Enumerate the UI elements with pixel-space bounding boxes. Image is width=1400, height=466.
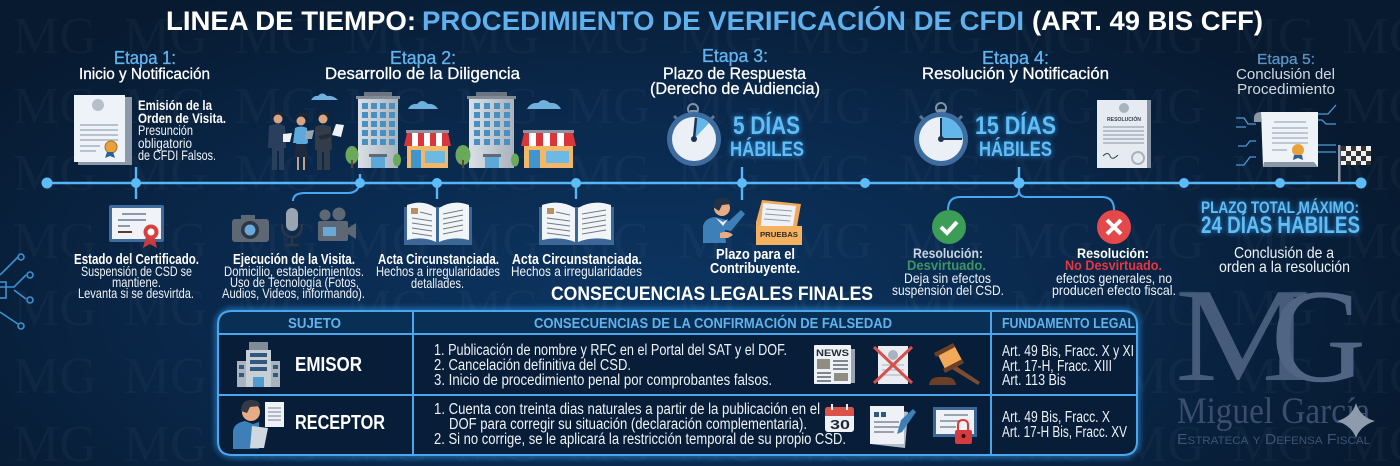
text: certificate status xyxy=(74,252,199,301)
text: receptor legal basis: Art. 17-H Bis, Fracc. XV xyxy=(1002,424,1127,441)
text: resolution desvirtuado: Resolución: xyxy=(913,245,983,261)
stage 3 heading: (Derecho de Audiencia) xyxy=(650,79,820,98)
title: (ART. 49 BIS CFF) xyxy=(1032,6,1263,36)
logo: Miguel García: Estrateca y Defensa Fiscal xyxy=(1177,431,1370,448)
icon: calendar 30 xyxy=(825,404,854,432)
stage 5 heading: Etapa 5: xyxy=(1257,51,1315,68)
text: 5 días hábiles: 5 DÍAS xyxy=(733,111,800,140)
text: certificate status: Estado del Certificado. xyxy=(74,252,199,268)
text: resolution desvirtuado xyxy=(892,245,1004,298)
stage 5 heading xyxy=(1236,51,1335,98)
background MG watermark: MG MG MG MG MG MG MG MG MG MG MG MG MG xyxy=(13,8,1400,65)
text: receptor consequences: 2. Si no corrige, se le aplicará la restricción temporal de su propio CSD. xyxy=(434,431,846,448)
text: maximum term: 24 DÍAS HÁBILES xyxy=(1201,211,1360,239)
text: emisor legal basis xyxy=(1002,343,1134,389)
text: emisor consequences: 1. Publicación de nombre y RFC en el Portal del SAT y el DOF. xyxy=(434,342,787,359)
officer 2 xyxy=(293,112,314,170)
text: acta 2: Hechos a irregularidades xyxy=(511,263,642,279)
stage 4 heading: Etapa 4: xyxy=(982,48,1049,68)
timeline xyxy=(42,167,1366,210)
logo: Miguel García: Miguel García xyxy=(1177,391,1370,432)
stage 4 heading: Resolución y Notificación xyxy=(922,64,1109,83)
text: acta 1: Hechos a irregularidades xyxy=(376,263,500,279)
icon: open book 2 xyxy=(539,203,614,245)
icon: taxpayer with evidence folder xyxy=(703,198,802,245)
logo: Miguel García xyxy=(1175,261,1375,448)
text: receptor consequences xyxy=(434,401,846,448)
officer 3 xyxy=(315,111,344,170)
icon: emisor building xyxy=(237,342,280,387)
text: receptor legal basis xyxy=(1002,409,1127,441)
text: visit order: Orden de Visita. xyxy=(138,110,226,126)
background MG watermark: MG MG MG MG MG MG MG MG MG MG MG MG MG xyxy=(13,145,1400,202)
icon: checkered flag xyxy=(1338,145,1371,183)
icon: camera, microphone, video camera xyxy=(232,208,356,245)
stage 2 heading: Desarrollo de la Diligencia xyxy=(325,64,521,83)
text: maximum term: PLAZO TOTAL MÁXIMO: xyxy=(1201,198,1359,217)
icon: closing scroll with circuits xyxy=(1236,105,1336,167)
text: taxpayer term xyxy=(710,246,800,277)
text: acta 1: detallades. xyxy=(411,275,464,291)
text: 15 días hábiles: 15 DÍAS xyxy=(975,111,1056,140)
icon: buildings and shops xyxy=(346,92,576,168)
text: 5 días hábiles xyxy=(730,111,804,161)
icon: newspaper xyxy=(814,345,855,384)
text: taxpayer term: Plazo para el xyxy=(716,246,795,263)
text: visit execution xyxy=(222,252,365,301)
text: visit execution: Ejecución de la Visita. xyxy=(233,252,355,268)
icon: stopwatch 15 days xyxy=(914,103,968,166)
text: visit execution: Domicilio, establecimientos. xyxy=(224,263,364,279)
text: maximum term: Conclusión de a xyxy=(1234,245,1334,262)
officer 1 xyxy=(268,111,292,170)
text: certificate status: mantiene. xyxy=(112,274,161,290)
text: acta 2: Acta Circunstanciada. xyxy=(512,252,642,268)
icon: locked certificate xyxy=(933,407,977,444)
text: emisor consequences: 3. Inicio de procedimiento penal por comprobantes falsos. xyxy=(434,372,772,389)
logo: Miguel García: M xyxy=(1175,261,1311,409)
text: 15 días hábiles: HÁBILES xyxy=(979,138,1052,161)
icon: visit order document xyxy=(74,95,132,165)
text: resolution desvirtuado: suspensión del CSD. xyxy=(892,282,1004,298)
table: consequences xyxy=(218,311,1137,455)
stage 3 heading: Etapa 3: xyxy=(702,46,768,66)
shop 2 xyxy=(521,130,576,168)
icon: officers xyxy=(268,111,344,170)
text: resolution no desvirtuado xyxy=(1052,245,1176,298)
icon: calendar 30: 30 xyxy=(830,417,850,432)
text: visit execution: Audios, Videos, informando). xyxy=(222,285,365,301)
text: resolution desvirtuado: Deja sin efectos xyxy=(904,270,991,286)
text: emisor legal basis: Art. 17-H, Fracc. XIII xyxy=(1002,358,1112,375)
text: visit order: obligatorio xyxy=(138,135,192,151)
icon: left circuit decoration xyxy=(0,254,33,329)
stage 3 heading: Plazo de Respuesta xyxy=(663,64,807,83)
text: emisor consequences: 2. Cancelación definitiva del CSD. xyxy=(434,357,631,374)
text: receptor legal basis: Art. 49 Bis, Fracc. X xyxy=(1002,409,1111,426)
table header: FUNDAMENTO LEGAL xyxy=(1002,315,1135,332)
text: visit order: Emisión de la xyxy=(138,97,212,113)
text: resolution desvirtuado: Desvirtuado. xyxy=(907,257,986,273)
heading: legal consequences: CONSECUENCIAS LEGALES FINALES xyxy=(551,284,873,305)
table header: CONSECUENCIAS DE LA CONFIRMACIÓN DE FALSEDAD xyxy=(534,314,892,332)
stage 4 heading xyxy=(922,48,1109,83)
icon: clouds xyxy=(311,94,561,109)
building 1 xyxy=(356,92,400,168)
title xyxy=(166,5,1263,36)
title: PROCEDIMIENTO DE VERIFICACIÓN DE CFDI xyxy=(422,5,1024,36)
text: emisor legal basis: Art. 113 Bis xyxy=(1002,372,1066,389)
background MG watermark: MG MG MG MG MG MG MG MG MG MG MG MG MG xyxy=(13,213,1400,270)
text: resolution no desvirtuado: Resolución: xyxy=(1077,245,1149,261)
text: acta 1 xyxy=(376,252,500,291)
text: maximum term xyxy=(1201,198,1360,276)
icon: resolution document: RESOLUCIÓN xyxy=(1107,115,1141,123)
text: acta 2 xyxy=(511,252,642,279)
text: receptor consequences: DOF para corregir su situación (declaración complementaria). xyxy=(449,416,807,433)
bracket to resolutions xyxy=(948,183,1114,210)
logo: Miguel García: G xyxy=(1271,262,1366,410)
stage 1 heading: Inicio y Notificación xyxy=(79,66,210,83)
text: certificate status: Levanta si se desvirtda. xyxy=(78,285,194,301)
background MG watermark: MG MG MG MG MG MG MG MG MG MG MG MG MG xyxy=(13,78,1400,135)
stage 5 heading: Conclusión del xyxy=(1236,66,1335,83)
stage 1 heading: Etapa 1: xyxy=(114,48,176,68)
icon: gavel xyxy=(929,343,980,385)
text: receptor consequences: 1. Cuenta con treinta dias naturales a partir de la publicación en el xyxy=(434,401,820,418)
text: visit order xyxy=(138,97,226,163)
background MG watermark: MG MG MG MG MG MG MG MG MG MG MG MG MG xyxy=(13,280,1400,337)
stage 1 heading xyxy=(79,48,210,83)
text: 5 días hábiles: HÁBILES xyxy=(730,138,804,161)
text: certificate status: Suspensión de CSD se xyxy=(81,263,192,279)
stage 5 heading: Procedimiento xyxy=(1237,81,1335,98)
icon: signed document with pen xyxy=(870,406,916,448)
background MG watermark: MG MG MG MG MG MG MG MG MG MG MG MG MG xyxy=(13,348,1400,405)
text: 15 días hábiles xyxy=(975,111,1056,161)
stage 2 heading xyxy=(325,48,521,83)
building 2 xyxy=(467,92,516,168)
icon: green check xyxy=(932,210,966,244)
stage 2 heading: Etapa 2: xyxy=(390,48,456,68)
icon: newspaper: NEWS xyxy=(816,348,849,358)
text: visit order: de CFDI Falsos. xyxy=(138,147,216,163)
icon: red cross xyxy=(1097,210,1131,244)
stage 3 heading xyxy=(650,46,820,98)
shop 1 xyxy=(404,130,451,168)
icon: taxpayer with evidence folder: PRUEBAS xyxy=(760,230,798,239)
text: taxpayer term: Contribuyente. xyxy=(710,260,800,277)
icon: certificate xyxy=(109,205,164,248)
icon: receptor person xyxy=(233,400,284,449)
text: emisor: EMISOR xyxy=(295,354,362,376)
text: maximum term: orden a la resolución xyxy=(1219,259,1350,276)
text: resolution no desvirtuado: efectos generales, no xyxy=(1056,270,1172,286)
text: resolution no desvirtuado: No Desvirtuado. xyxy=(1065,257,1162,273)
title: LINEA DE TIEMPO: xyxy=(166,6,416,36)
text: visit execution: Uso de Tecnología (Fotos, xyxy=(230,274,359,290)
text: visit order: Presunción xyxy=(138,122,193,138)
text: receptor: RECEPTOR xyxy=(295,412,385,434)
branch to visit xyxy=(293,183,360,201)
text: acta 1: Acta Circunstanciada. xyxy=(378,252,499,268)
text: emisor consequences xyxy=(434,342,787,389)
table header: SUJETO xyxy=(288,315,341,332)
icon: open book 1 xyxy=(404,203,472,245)
text: emisor legal basis: Art. 49 Bis, Fracc. X y XI xyxy=(1002,343,1134,360)
icon: crossed certificate xyxy=(874,346,912,384)
text: resolution no desvirtuado: producen efecto fiscal. xyxy=(1052,282,1176,298)
table header xyxy=(288,314,1135,332)
icon: resolution document xyxy=(1097,100,1151,168)
icon: stopwatch 5 days xyxy=(667,104,721,166)
